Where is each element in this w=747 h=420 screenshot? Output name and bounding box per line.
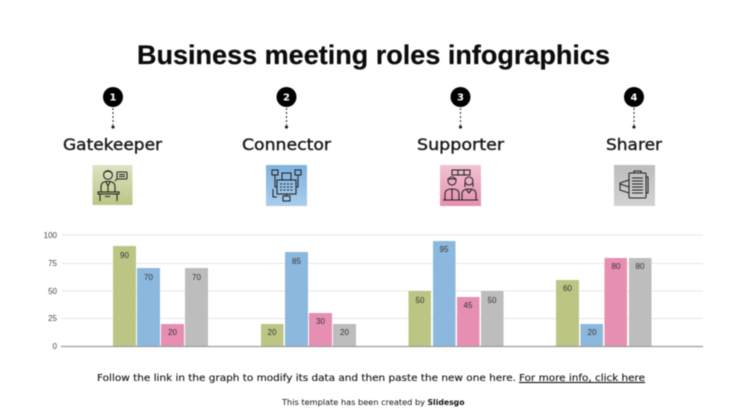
bar group 3: 50 (416, 296, 425, 305)
bar group 3: 45 (464, 301, 473, 310)
number badge 3: 3 (457, 92, 464, 104)
chart baseline (61, 346, 703, 348)
bar group 3 (408, 241, 504, 346)
title: Business meeting roles infographics (137, 40, 610, 70)
number badge 2: 2 (283, 92, 290, 104)
bar group 1: 90 (120, 251, 129, 260)
bar group 2: 85 (292, 257, 301, 266)
bar group 2 (261, 252, 356, 346)
chart gridlines (61, 235, 703, 318)
connector line 4 (632, 108, 636, 129)
bar group 1 (113, 246, 208, 346)
footer instruction text: For more info, click here (519, 373, 645, 384)
bar group 1: 70 (144, 273, 153, 282)
bar group 4: 20 (588, 328, 597, 337)
chart y axis labels: 25 (48, 314, 58, 323)
heading: Supporter: Supporter (417, 135, 504, 154)
bar group 3: 95 (440, 245, 449, 254)
chart y axis labels: 50 (48, 287, 58, 296)
bar group 4: 80 (636, 262, 645, 271)
connector line 3 (459, 108, 462, 129)
heading: Sharer: Sharer (606, 135, 662, 154)
role column: Supporter (417, 87, 504, 206)
icon: two people with speech bubbles (440, 165, 481, 206)
bar group 2: 30 (316, 317, 325, 326)
role column: Connector (242, 87, 331, 206)
credit line: Slidesgo (428, 398, 464, 407)
chart y axis labels (44, 231, 58, 351)
role column: Sharer (606, 87, 662, 206)
bar chart (44, 231, 703, 351)
footer instruction text: Follow the link in the graph to modify its data and then paste the new one here. (97, 373, 516, 384)
icon: document and megaphone (614, 165, 655, 206)
bar group 1: 20 (168, 328, 177, 337)
bar group 4 (556, 258, 652, 346)
bar group 4: 80 (612, 262, 621, 271)
icon: person at desk (92, 165, 132, 205)
chart y axis labels: 0 (53, 342, 58, 351)
chart y axis labels: 100 (44, 231, 58, 240)
number badge 4: 4 (631, 92, 638, 104)
bar group 2: 20 (268, 328, 277, 337)
bar group 2: 20 (340, 328, 349, 337)
connector line 1 (111, 108, 115, 129)
bar group 4: 60 (563, 284, 572, 293)
heading: Gatekeeper: Gatekeeper (63, 135, 162, 154)
bar group 1: 70 (192, 273, 201, 282)
icon: connected telephone (266, 165, 307, 206)
heading: Connector: Connector (242, 135, 331, 154)
bar group 3: 50 (488, 296, 497, 305)
connector line 2 (285, 108, 288, 129)
number badge 1: 1 (110, 92, 117, 104)
chart y axis labels: 75 (48, 259, 58, 268)
credit line: This template has been created by (281, 398, 426, 407)
role column: Gatekeeper (63, 87, 162, 205)
